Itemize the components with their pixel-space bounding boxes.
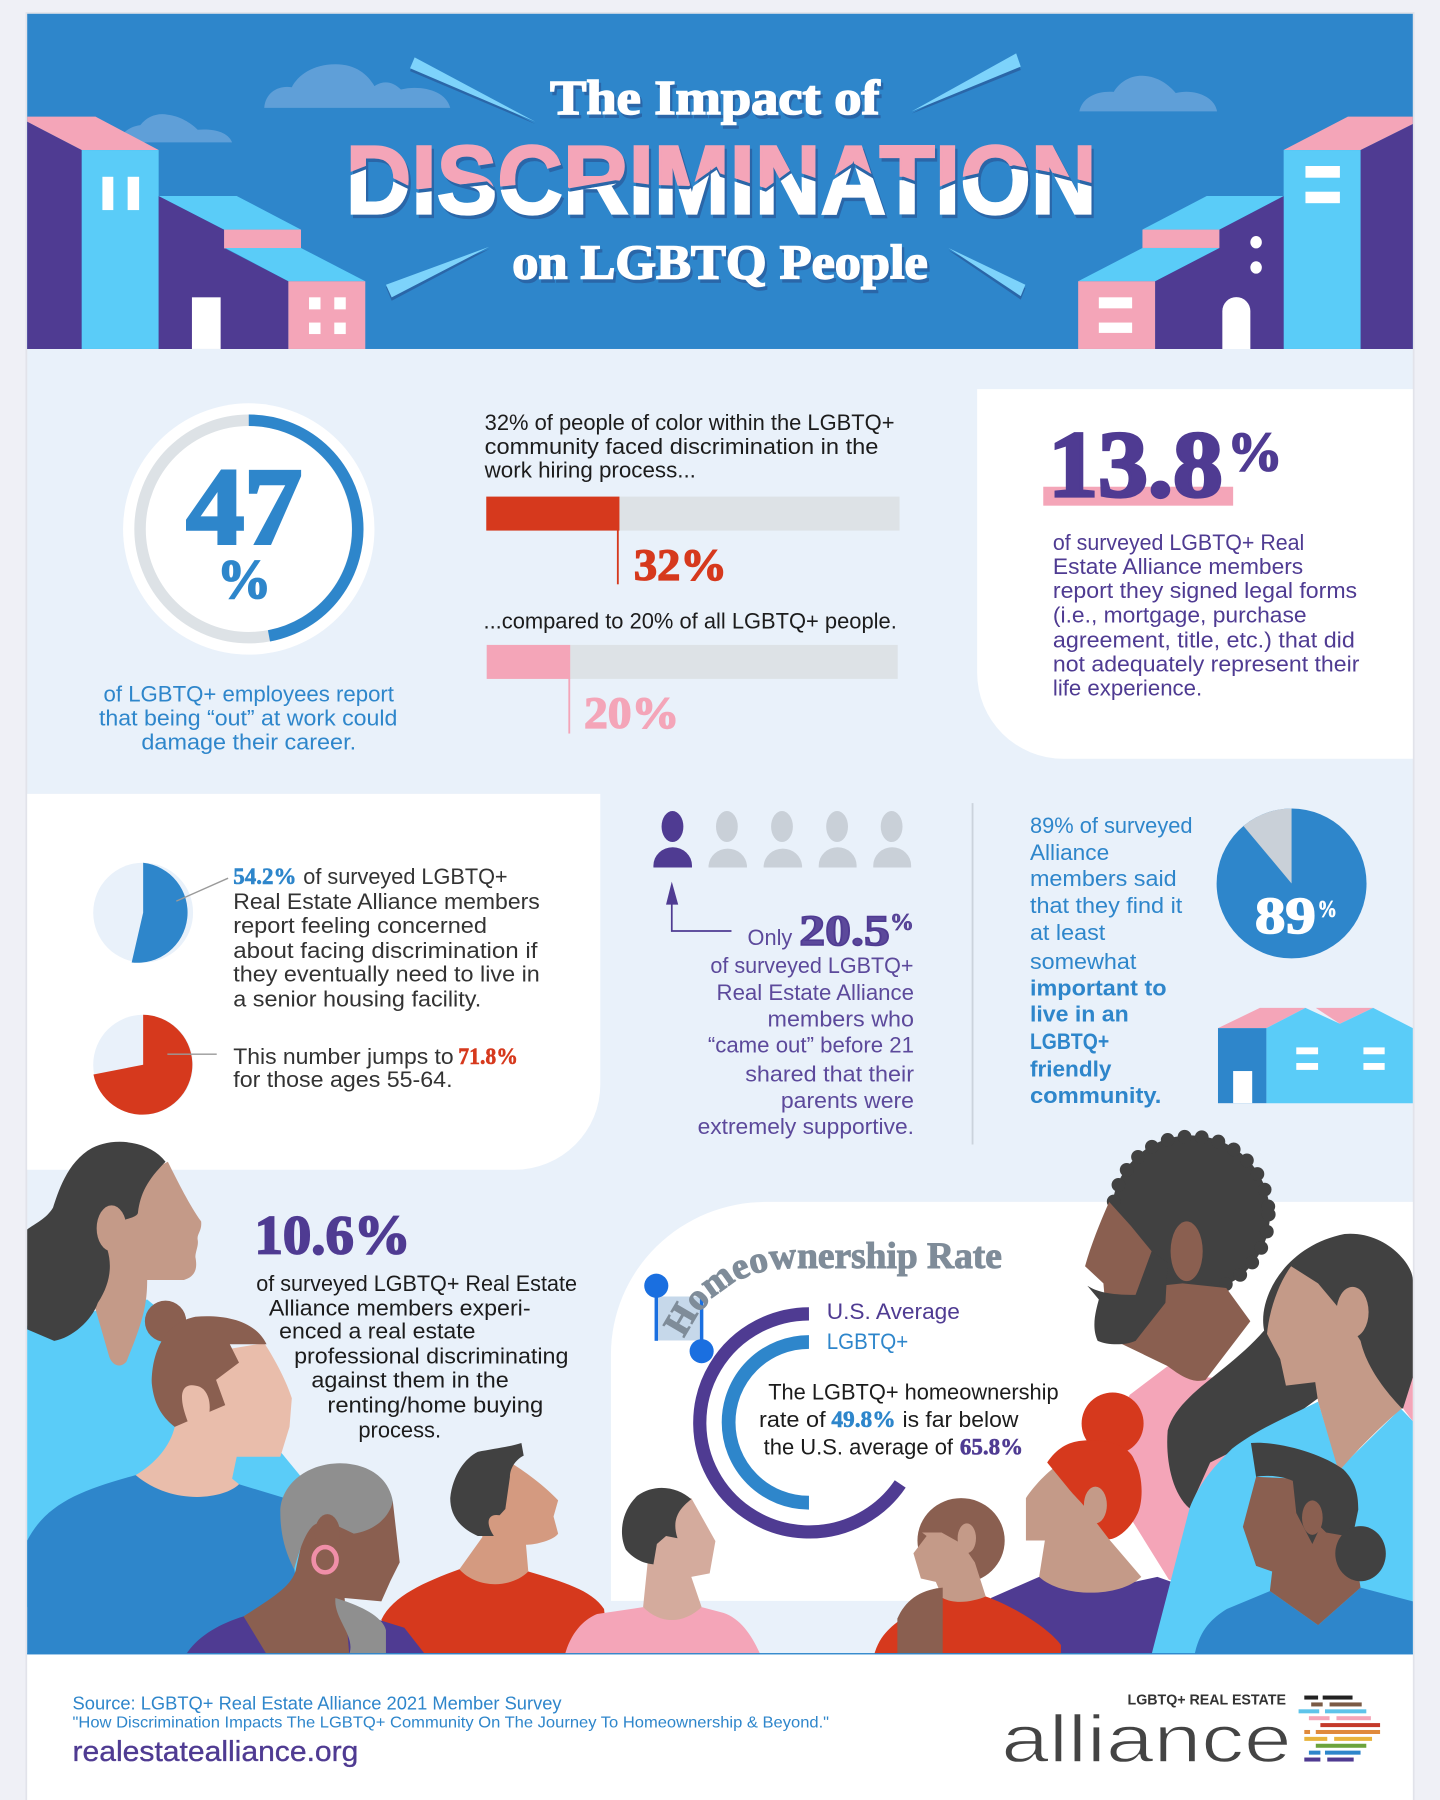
text: 10.6 percent copy: process. bbox=[358, 1418, 441, 1443]
text: 47 percent caption: of LGBTQ+ employees report bbox=[104, 681, 394, 706]
text: 20.5 percent: 20.5 bbox=[799, 907, 890, 955]
text: 10.6 percent copy: against them in the bbox=[311, 1368, 509, 1393]
person: girl with ponytail bbox=[874, 1498, 1061, 1654]
text: 89 percent copy: members said bbox=[1030, 866, 1177, 891]
person: bearded man with afro bbox=[1085, 1135, 1413, 1590]
text: 89 percent copy: somewhat bbox=[1030, 949, 1136, 974]
text: senior housing copy: 54.2% bbox=[233, 864, 296, 889]
logo: LGBTQ+ Real Estate Alliance: LGBTQ+ REAL ESTATE bbox=[1128, 1693, 1286, 1709]
panel: 47 percent donut: 47 bbox=[186, 446, 302, 567]
text: 20.5 percent: of surveyed LGBTQ+ bbox=[710, 953, 914, 978]
text: senior housing copy: report feeling concerned bbox=[233, 913, 487, 938]
panel: 13.8 percent card: Estate Alliance members bbox=[1053, 554, 1303, 579]
person: woman with long dark hair, back hair bbox=[1167, 1234, 1413, 1508]
panel: 13.8 percent card: report they signed legal forms bbox=[1053, 578, 1357, 603]
text: 20.5 percent: extremely supportive. bbox=[698, 1114, 914, 1139]
icon: left buildings bbox=[27, 117, 365, 349]
text: 10.6 percent copy: renting/home buying bbox=[327, 1393, 543, 1418]
bar chart: 20 percent: 20% bbox=[584, 688, 679, 738]
icon: text selection handles bbox=[644, 1274, 714, 1363]
title: DISCRIMINATION: DISCRIMINATION bbox=[346, 126, 1097, 235]
text: 32 percent intro bbox=[484, 410, 894, 483]
person: woman with long dark hair, face and top bbox=[1152, 1266, 1413, 1654]
text: 89 percent copy: that they find it bbox=[1030, 893, 1182, 918]
panel: footer bbox=[27, 1653, 1413, 1800]
text: source: realestatealliance.org bbox=[73, 1736, 358, 1768]
text: 20.5 percent: “came out” before 21 bbox=[708, 1033, 914, 1058]
text: 89 percent copy: LGBTQ+ bbox=[1030, 1029, 1109, 1054]
text: 20 percent intro: ...compared to 20% of all LGBTQ+ people. bbox=[484, 608, 897, 633]
text: 20.5 percent: Only bbox=[748, 925, 792, 950]
icon: right buildings bbox=[1078, 117, 1413, 349]
panel: 13.8 percent card: not adequately represent their bbox=[1053, 652, 1359, 677]
panel: 13.8 percent card: agreement, title, etc.) that did bbox=[1053, 627, 1355, 652]
person: woman in pink top bbox=[565, 1488, 760, 1654]
logo: LGBTQ+ Real Estate Alliance bbox=[1001, 1693, 1380, 1777]
text: 10.6 percent copy: Alliance members experi- bbox=[269, 1296, 531, 1321]
panel: 13.8 percent card: (i.e., mortgage, purchase bbox=[1053, 603, 1307, 628]
panel: 13.8 percent card bbox=[977, 389, 1413, 759]
text: homeownership copy: rate of bbox=[759, 1407, 827, 1432]
text: homeownership copy: the U.S. average of bbox=[764, 1434, 954, 1459]
text: homeownership copy bbox=[759, 1379, 1059, 1459]
text: 47 percent caption: damage their career. bbox=[141, 730, 356, 755]
title: The Impact of: The Impact of bbox=[550, 72, 881, 125]
text: 89 percent copy: at least bbox=[1030, 920, 1105, 945]
title: DISCRIMINATION: DISCRIMINATION bbox=[346, 126, 1097, 235]
text: 20.5 percent bbox=[698, 907, 914, 1139]
text: senior housing copy: This number jumps to bbox=[233, 1044, 454, 1069]
bar chart: 32 percent bbox=[486, 497, 900, 590]
text: 89 percent copy: 89% of surveyed bbox=[1030, 813, 1193, 838]
person: front woman in blue top bbox=[1195, 1443, 1413, 1654]
text: senior housing copy bbox=[233, 864, 540, 1092]
legend: homeownership: LGBTQ+ bbox=[827, 1329, 908, 1354]
panel: 13.8 percent card: % bbox=[1227, 422, 1283, 483]
text: 89 percent copy: live in an bbox=[1030, 1002, 1129, 1027]
text: homeownership copy: The LGBTQ+ homeownership bbox=[768, 1379, 1059, 1404]
person: older woman with grey hair bbox=[186, 1463, 425, 1654]
text: homeownership copy: is far below bbox=[903, 1407, 1019, 1432]
chart: 89 percent pie: 89 bbox=[1255, 888, 1316, 945]
title: DISCRIMINATION: DISCRIMINATION bbox=[348, 129, 1099, 238]
title: on LGBTQ People: on LGBTQ People bbox=[515, 240, 930, 293]
title: DISCRIMINATION bbox=[350, 144, 1094, 220]
text: 20.5 percent: parents were bbox=[781, 1088, 914, 1113]
panel: 47 percent donut bbox=[123, 403, 374, 655]
text: source bbox=[73, 1692, 829, 1768]
person: man with bun bbox=[27, 1301, 296, 1654]
chart: 89 percent pie bbox=[1217, 809, 1367, 958]
heading: 10.6 percent: 10.6% bbox=[255, 1205, 411, 1266]
text: 10.6 percent copy bbox=[256, 1271, 577, 1443]
person: woman with red bun bbox=[991, 1392, 1194, 1654]
bar chart: 32 percent: 32% bbox=[634, 540, 727, 590]
panel: header banner bbox=[27, 14, 1413, 349]
text: 20.5 percent: Real Estate Alliance bbox=[717, 980, 914, 1005]
text: 20.5 percent: members who bbox=[768, 1006, 914, 1031]
text: homeownership copy: 49.8% bbox=[831, 1407, 896, 1432]
text: homeownership copy: 65.8% bbox=[960, 1434, 1023, 1459]
text: senior housing copy: about facing discrimination if bbox=[233, 938, 539, 963]
illustration: left group of people bbox=[27, 1142, 760, 1654]
panel: 13.8 percent card: of surveyed LGBTQ+ Real bbox=[1053, 530, 1304, 555]
text: senior housing copy: of surveyed LGBTQ+ bbox=[303, 864, 508, 889]
text: 89 percent copy: friendly bbox=[1030, 1056, 1111, 1081]
chart: 89 percent pie: % bbox=[1318, 897, 1337, 923]
text: 89 percent copy: Alliance bbox=[1030, 840, 1109, 865]
text: 32 percent intro: 32% of people of color within the LGBTQ+ bbox=[485, 410, 894, 435]
text: 89 percent copy bbox=[1030, 813, 1193, 1108]
text: 10.6 percent copy: of surveyed LGBTQ+ Real Estate bbox=[256, 1271, 577, 1296]
text: 32 percent intro: work hiring process... bbox=[484, 458, 696, 483]
text: senior housing copy: for those ages 55-64. bbox=[233, 1067, 453, 1092]
text: 89 percent copy: important to bbox=[1030, 975, 1167, 1000]
icon: friendly community houses bbox=[1218, 1008, 1413, 1103]
text: 32 percent intro: community faced discrimination in the bbox=[485, 434, 878, 459]
legend: homeownership bbox=[827, 1299, 960, 1354]
text: 10.6 percent copy: professional discriminating bbox=[294, 1344, 568, 1369]
text: senior housing copy: 71.8% bbox=[458, 1044, 518, 1069]
title: The Impact of: The Impact of bbox=[552, 76, 883, 129]
panel: senior housing card bbox=[27, 794, 600, 1170]
text: source: Source: LGBTQ+ Real Estate Alliance 2021 Member Survey bbox=[73, 1692, 562, 1713]
icon: spike accents bbox=[386, 53, 1025, 301]
chart: 54.2 percent pie bbox=[93, 863, 228, 963]
panel: 13.8 percent card: life experience. bbox=[1053, 676, 1202, 701]
logo: LGBTQ+ Real Estate Alliance: alliance bbox=[1001, 1703, 1292, 1777]
text: senior housing copy: a senior housing facility. bbox=[233, 986, 481, 1011]
text: 47 percent caption bbox=[99, 681, 397, 755]
legend: homeownership: U.S. Average bbox=[827, 1299, 960, 1324]
icon row: five people bbox=[653, 811, 911, 868]
arrow: to highlighted person bbox=[666, 882, 731, 931]
text: senior housing copy: they eventually need to live in bbox=[233, 962, 540, 987]
text: source: "How Discrimination Impacts The LGBTQ+ Community On The Journey To Homeownership & Beyond." bbox=[73, 1714, 829, 1732]
text: 10.6 percent copy: enced a real estate bbox=[279, 1318, 475, 1343]
panel: homeownership card bbox=[611, 1202, 1413, 1601]
icon: clouds bbox=[117, 64, 1217, 142]
chart: 71.8 percent pie bbox=[93, 1015, 217, 1115]
person: woman with long hair bbox=[27, 1142, 304, 1607]
text: senior housing copy: Real Estate Alliance members bbox=[233, 889, 540, 914]
panel: 13.8 percent card: 13.8 bbox=[1048, 413, 1223, 517]
title: on LGBTQ People: on LGBTQ People bbox=[512, 236, 928, 289]
bar chart: 20 percent bbox=[487, 645, 898, 738]
panel: 47 percent donut: % bbox=[217, 549, 271, 610]
illustration: right group of people bbox=[874, 1135, 1413, 1654]
person: man in red shirt bbox=[381, 1443, 609, 1654]
text: 89 percent copy: community. bbox=[1030, 1083, 1161, 1108]
text: 47 percent caption: that being “out” at work could bbox=[99, 706, 397, 731]
chart: homeownership rings bbox=[700, 1314, 900, 1532]
text: 20.5 percent: % bbox=[890, 910, 914, 936]
heading: Homeownership Rate: Homeownership Rate bbox=[662, 1242, 1002, 1338]
text: 20.5 percent: shared that their bbox=[745, 1061, 914, 1086]
